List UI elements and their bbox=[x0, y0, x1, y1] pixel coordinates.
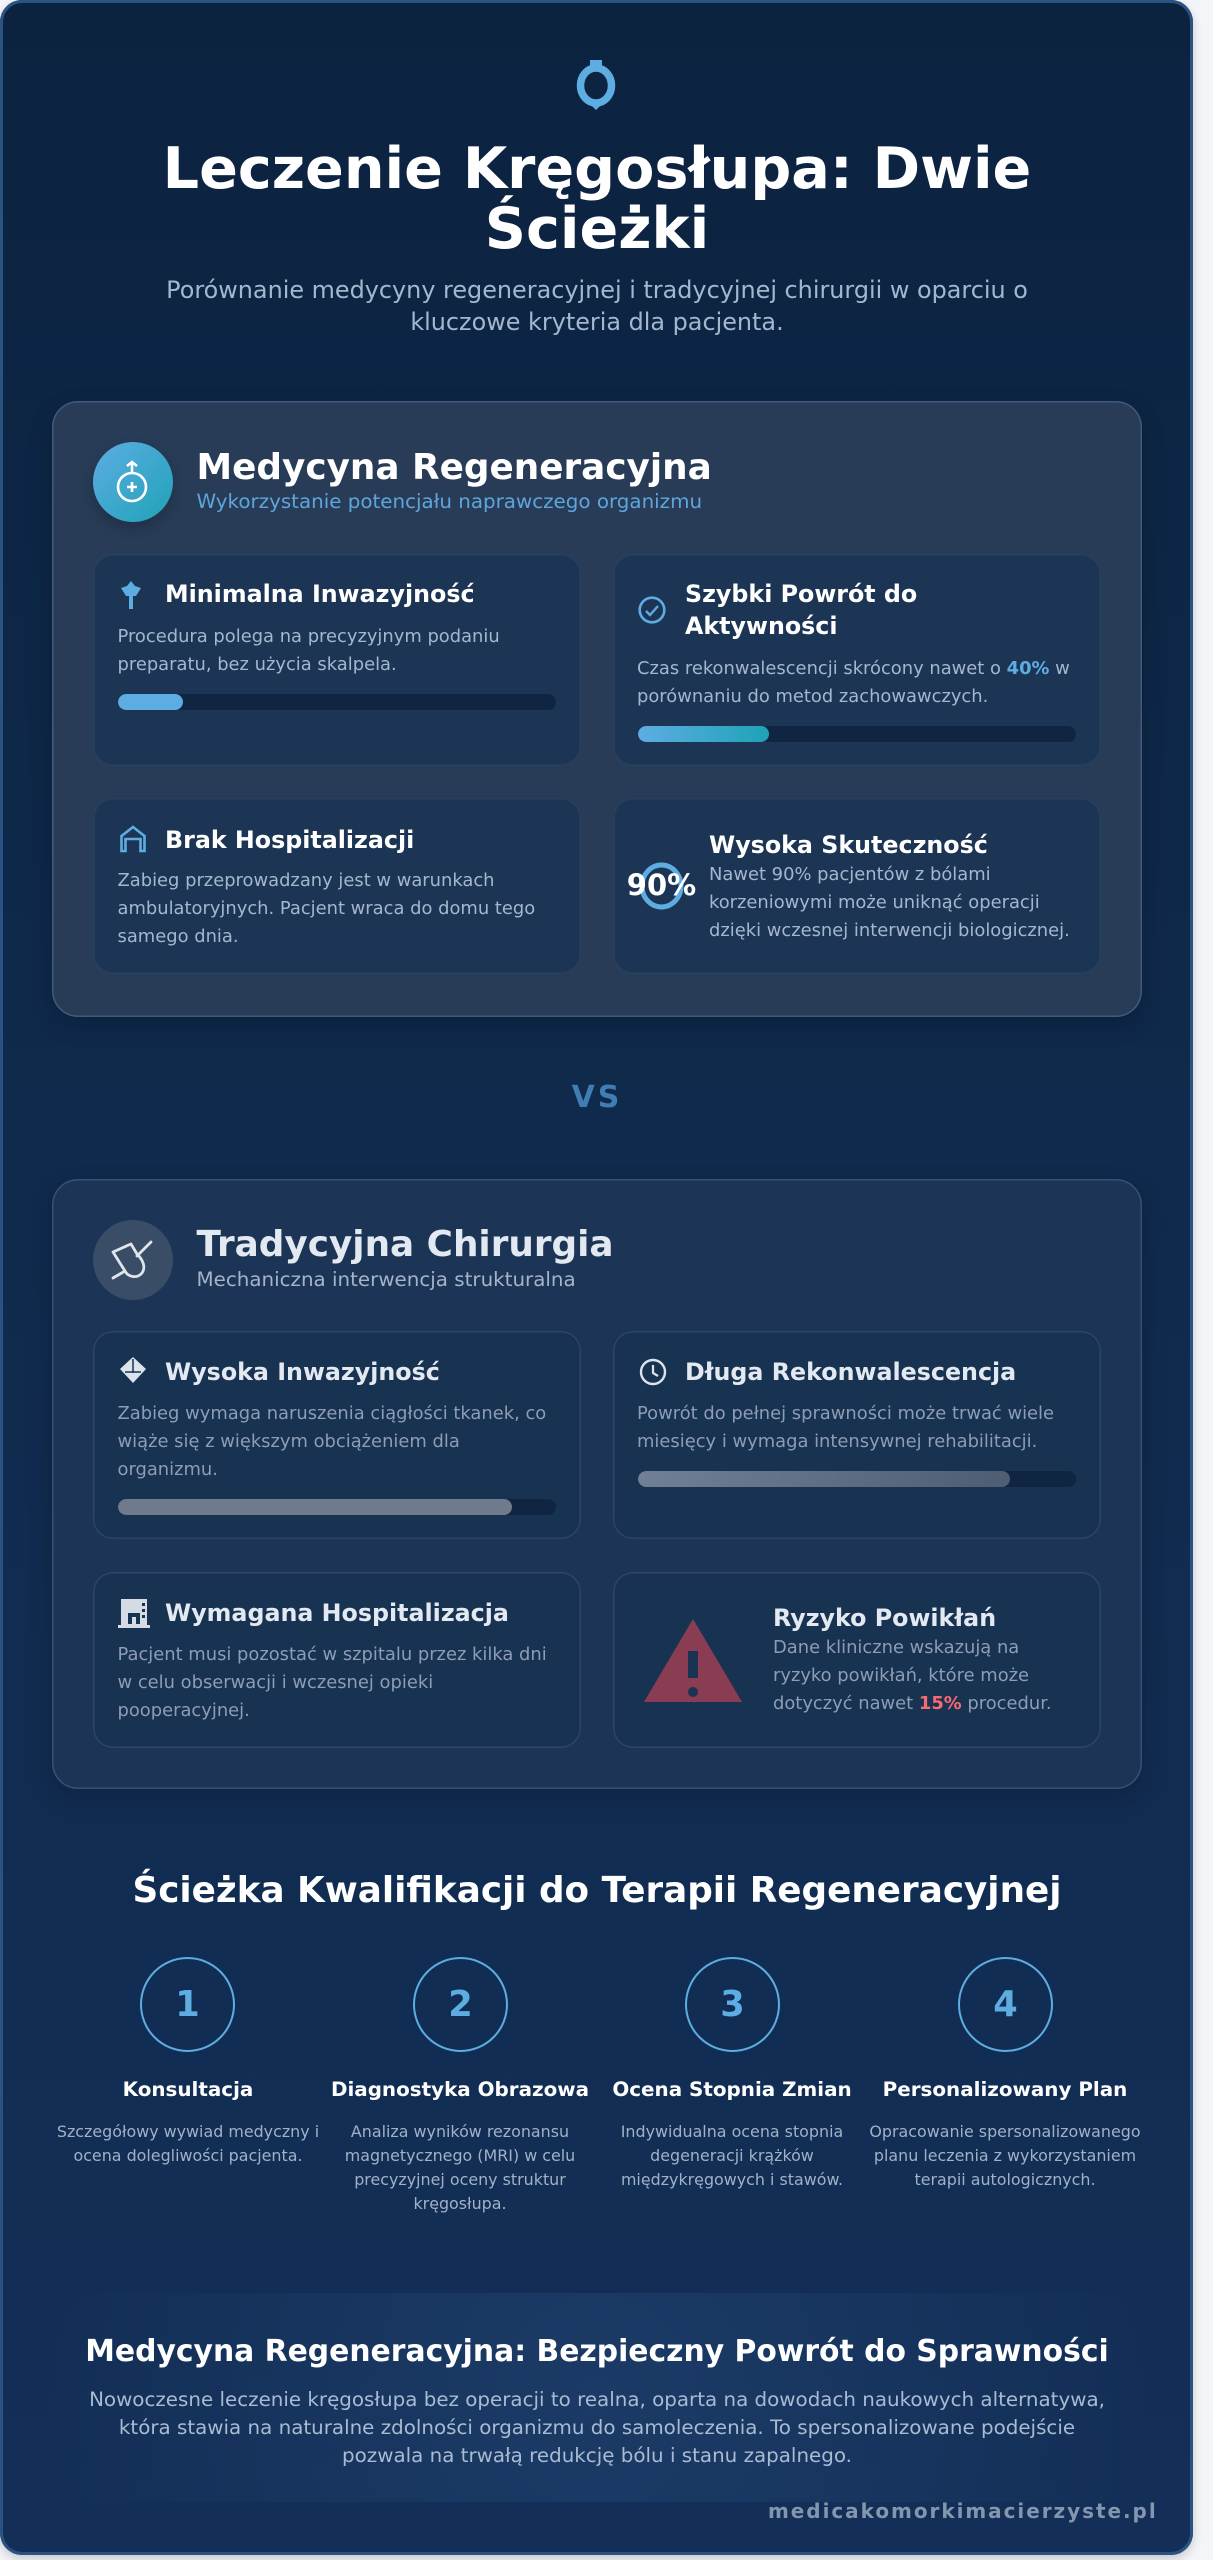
icon: scalpel bbox=[93, 1220, 173, 1300]
card text: Powrót do pełnej sprawności może trwać wiele bbox=[637, 1403, 1054, 1424]
card: no hospitalization bbox=[92, 798, 581, 974]
card text: Zabieg wymaga naruszenia ciągłości tkanek, co bbox=[118, 1403, 546, 1424]
panel subheading: Wykorzystanie potencjału naprawczego organizmu bbox=[196, 490, 702, 513]
footer source: medicakomorkimacierzyste.pl bbox=[768, 2499, 1158, 2523]
card: high invasiveness bbox=[92, 1331, 581, 1539]
progress bar 90% bbox=[118, 1499, 556, 1515]
summary text: Nowoczesne leczenie kręgosłupa bez operacji to realna, oparta na dowodach naukowych alternatywa, bbox=[89, 2388, 1105, 2411]
card heading: Minimalna Inwazyjność bbox=[165, 580, 475, 608]
card heading bbox=[685, 580, 917, 640]
step 2 text: Analiza wyników rezonansu bbox=[351, 2122, 569, 2140]
card text: Dane kliniczne wskazują na bbox=[773, 1637, 1019, 1658]
title: Leczenie Kręgosłupa: Dwie bbox=[163, 136, 1031, 202]
panel heading: Tradycyjna Chirurgia bbox=[196, 1224, 614, 1264]
step 2 title: Diagnostyka Obrazowa bbox=[331, 2078, 589, 2101]
step 3 text bbox=[621, 2122, 843, 2188]
card text: dotyczyć nawet 15% procedur. bbox=[773, 1693, 1052, 1714]
card text: porównaniu do metod zachowawczych. bbox=[637, 686, 988, 707]
card heading: Wysoka Skuteczność bbox=[709, 830, 988, 858]
step 3 text: Indywidualna ocena stopnia bbox=[621, 2122, 843, 2140]
card heading: Długa Rekonwalescencja bbox=[685, 1358, 1016, 1386]
card text bbox=[637, 1403, 1054, 1452]
card text: preparatu, bez użycia skalpela. bbox=[118, 654, 397, 675]
step 1 text: ocena dolegliwości pacjenta. bbox=[73, 2146, 303, 2164]
step 2 text bbox=[345, 2122, 575, 2212]
card text bbox=[773, 1637, 1052, 1714]
icon: house bbox=[120, 826, 146, 852]
section heading: qualification path: Ścieżka Kwalifikacji do Terapii Regeneracyjnej bbox=[132, 1870, 1062, 1911]
panel heading: Medycyna Regeneracyjna bbox=[196, 446, 712, 488]
progress bar 15% bbox=[118, 694, 556, 710]
step 3 number bbox=[685, 1957, 780, 2052]
card heading: Wysoka Inwazyjność bbox=[165, 1358, 440, 1386]
step 2 text: magnetycznego (MRI) w celu bbox=[345, 2146, 575, 2164]
step 2 number: 2 bbox=[448, 1984, 473, 2025]
card text: Zabieg przeprowadzany jest w warunkach bbox=[118, 870, 495, 891]
icon: stopwatch with plus bbox=[93, 442, 173, 522]
step 2 text: precyzyjnej oceny struktur bbox=[354, 2170, 566, 2188]
card heading: Aktywności bbox=[685, 612, 838, 640]
card text: ambulatoryjnych. Pacjent wraca do domu tego bbox=[118, 898, 535, 919]
card heading: Ryzyko Powikłań bbox=[773, 1604, 996, 1632]
panel: regenerative medicine bbox=[52, 401, 1142, 1017]
card heading: Brak Hospitalizacji bbox=[165, 826, 414, 854]
icon: header spine ring bbox=[576, 60, 616, 110]
card text: pooperacyjnej. bbox=[118, 1700, 250, 1721]
step 4 number bbox=[958, 1957, 1053, 2052]
step 4 text bbox=[869, 2122, 1141, 2188]
step 3 text: degeneracji krążków bbox=[650, 2146, 814, 2164]
panel: traditional surgery bbox=[52, 1179, 1142, 1789]
card text bbox=[709, 864, 1070, 941]
card: complication risk bbox=[612, 1572, 1100, 1748]
card text: Procedura polega na precyzyjnym podaniu bbox=[118, 626, 500, 647]
card text: dzięki wczesnej interwencji biologicznej. bbox=[709, 920, 1070, 941]
summary text: pozwala na trwałą redukcję bólu i stanu zapalnego. bbox=[342, 2444, 852, 2467]
summary heading: Medycyna Regeneracyjna: Bezpieczny Powrót do Sprawności bbox=[85, 2334, 1109, 2368]
card text: Nawet 90% pacjentów z bólami bbox=[709, 864, 991, 885]
card text: ryzyko powikłań, które może bbox=[773, 1665, 1029, 1686]
card text: miesięcy i wymaga intensywnej rehabilitacji. bbox=[637, 1431, 1037, 1452]
step 2 text: kręgosłupa. bbox=[413, 2194, 507, 2212]
step 4 text: planu leczenia z wykorzystaniem bbox=[874, 2146, 1136, 2164]
step 4 text: Opracowanie spersonalizowanego bbox=[869, 2122, 1141, 2140]
step 4 title: Personalizowany Plan bbox=[883, 2078, 1127, 2101]
step 4 number: 4 bbox=[993, 1984, 1018, 2025]
card text bbox=[118, 626, 500, 675]
summary text: która stawia na naturalne zdolności organizmu do samoleczenia. To spersonalizowane podejście bbox=[119, 2416, 1075, 2439]
step 3 text: międzykręgowych i stawów. bbox=[621, 2170, 843, 2188]
step 1 number: 1 bbox=[175, 1984, 200, 2025]
summary box bbox=[52, 2293, 1142, 2502]
card text: korzeniowymi może uniknąć operacji bbox=[709, 892, 1040, 913]
title bbox=[163, 136, 1031, 262]
summary text bbox=[89, 2388, 1105, 2467]
step 1 text bbox=[57, 2122, 319, 2164]
card text: samego dnia. bbox=[118, 926, 239, 947]
card text bbox=[118, 1403, 546, 1480]
card: minimal invasiveness bbox=[92, 554, 581, 766]
card text: w celu obserwacji i wczesnej opieki bbox=[118, 1672, 433, 1693]
title: Ścieżki bbox=[485, 196, 709, 262]
card text: Czas rekonwalescencji skrócony nawet o 40% w bbox=[637, 658, 1070, 679]
card: required hospitalization bbox=[92, 1572, 581, 1748]
subtitle: kluczowe kryteria dla pacjenta. bbox=[410, 308, 784, 336]
icon: warning triangle bbox=[644, 1619, 742, 1702]
card text: Pacjent musi pozostać w szpitalu przez kilka dni bbox=[118, 1644, 547, 1665]
step 3 number: 3 bbox=[720, 1984, 745, 2025]
card: fast return bbox=[612, 554, 1100, 766]
icon: check circle bbox=[638, 596, 666, 624]
icon: clock bbox=[640, 1358, 666, 1386]
progress bar 30% bbox=[638, 726, 1076, 742]
subtitle: Porównanie medycyny regeneracyjnej i tradycyjnej chirurgii w oparciu o bbox=[166, 276, 1028, 304]
panel subheading: Mechaniczna interwencja strukturalna bbox=[196, 1268, 576, 1291]
card text bbox=[118, 1644, 547, 1721]
step 2 number bbox=[413, 1957, 508, 2052]
vs divider: VS bbox=[572, 1080, 622, 1115]
icon: hospital building bbox=[118, 1599, 150, 1628]
card text: organizmu. bbox=[118, 1459, 218, 1480]
step 1 text: Szczegółowy wywiad medyczny i bbox=[57, 2122, 319, 2140]
icon: diamond scalpel bbox=[120, 1357, 146, 1383]
card: long recovery bbox=[612, 1331, 1100, 1539]
icon: needle bbox=[121, 581, 141, 609]
card heading: Szybki Powrót do bbox=[685, 580, 917, 608]
step 1 number bbox=[140, 1957, 235, 2052]
card text bbox=[118, 870, 535, 947]
stat ring 90%: 90% bbox=[627, 868, 696, 902]
card text: wiąże się z większym obciążeniem dla bbox=[118, 1431, 460, 1452]
subtitle bbox=[166, 276, 1028, 336]
step 4 text: terapii autologicznych. bbox=[914, 2170, 1096, 2188]
card heading: Wymagana Hospitalizacja bbox=[165, 1598, 509, 1626]
step 1 title: Konsultacja bbox=[123, 2078, 253, 2101]
card text bbox=[637, 658, 1070, 707]
step 3 title: Ocena Stopnia Zmian bbox=[612, 2078, 852, 2101]
card: high efficacy bbox=[612, 798, 1100, 974]
progress bar 85% bbox=[638, 1471, 1076, 1487]
